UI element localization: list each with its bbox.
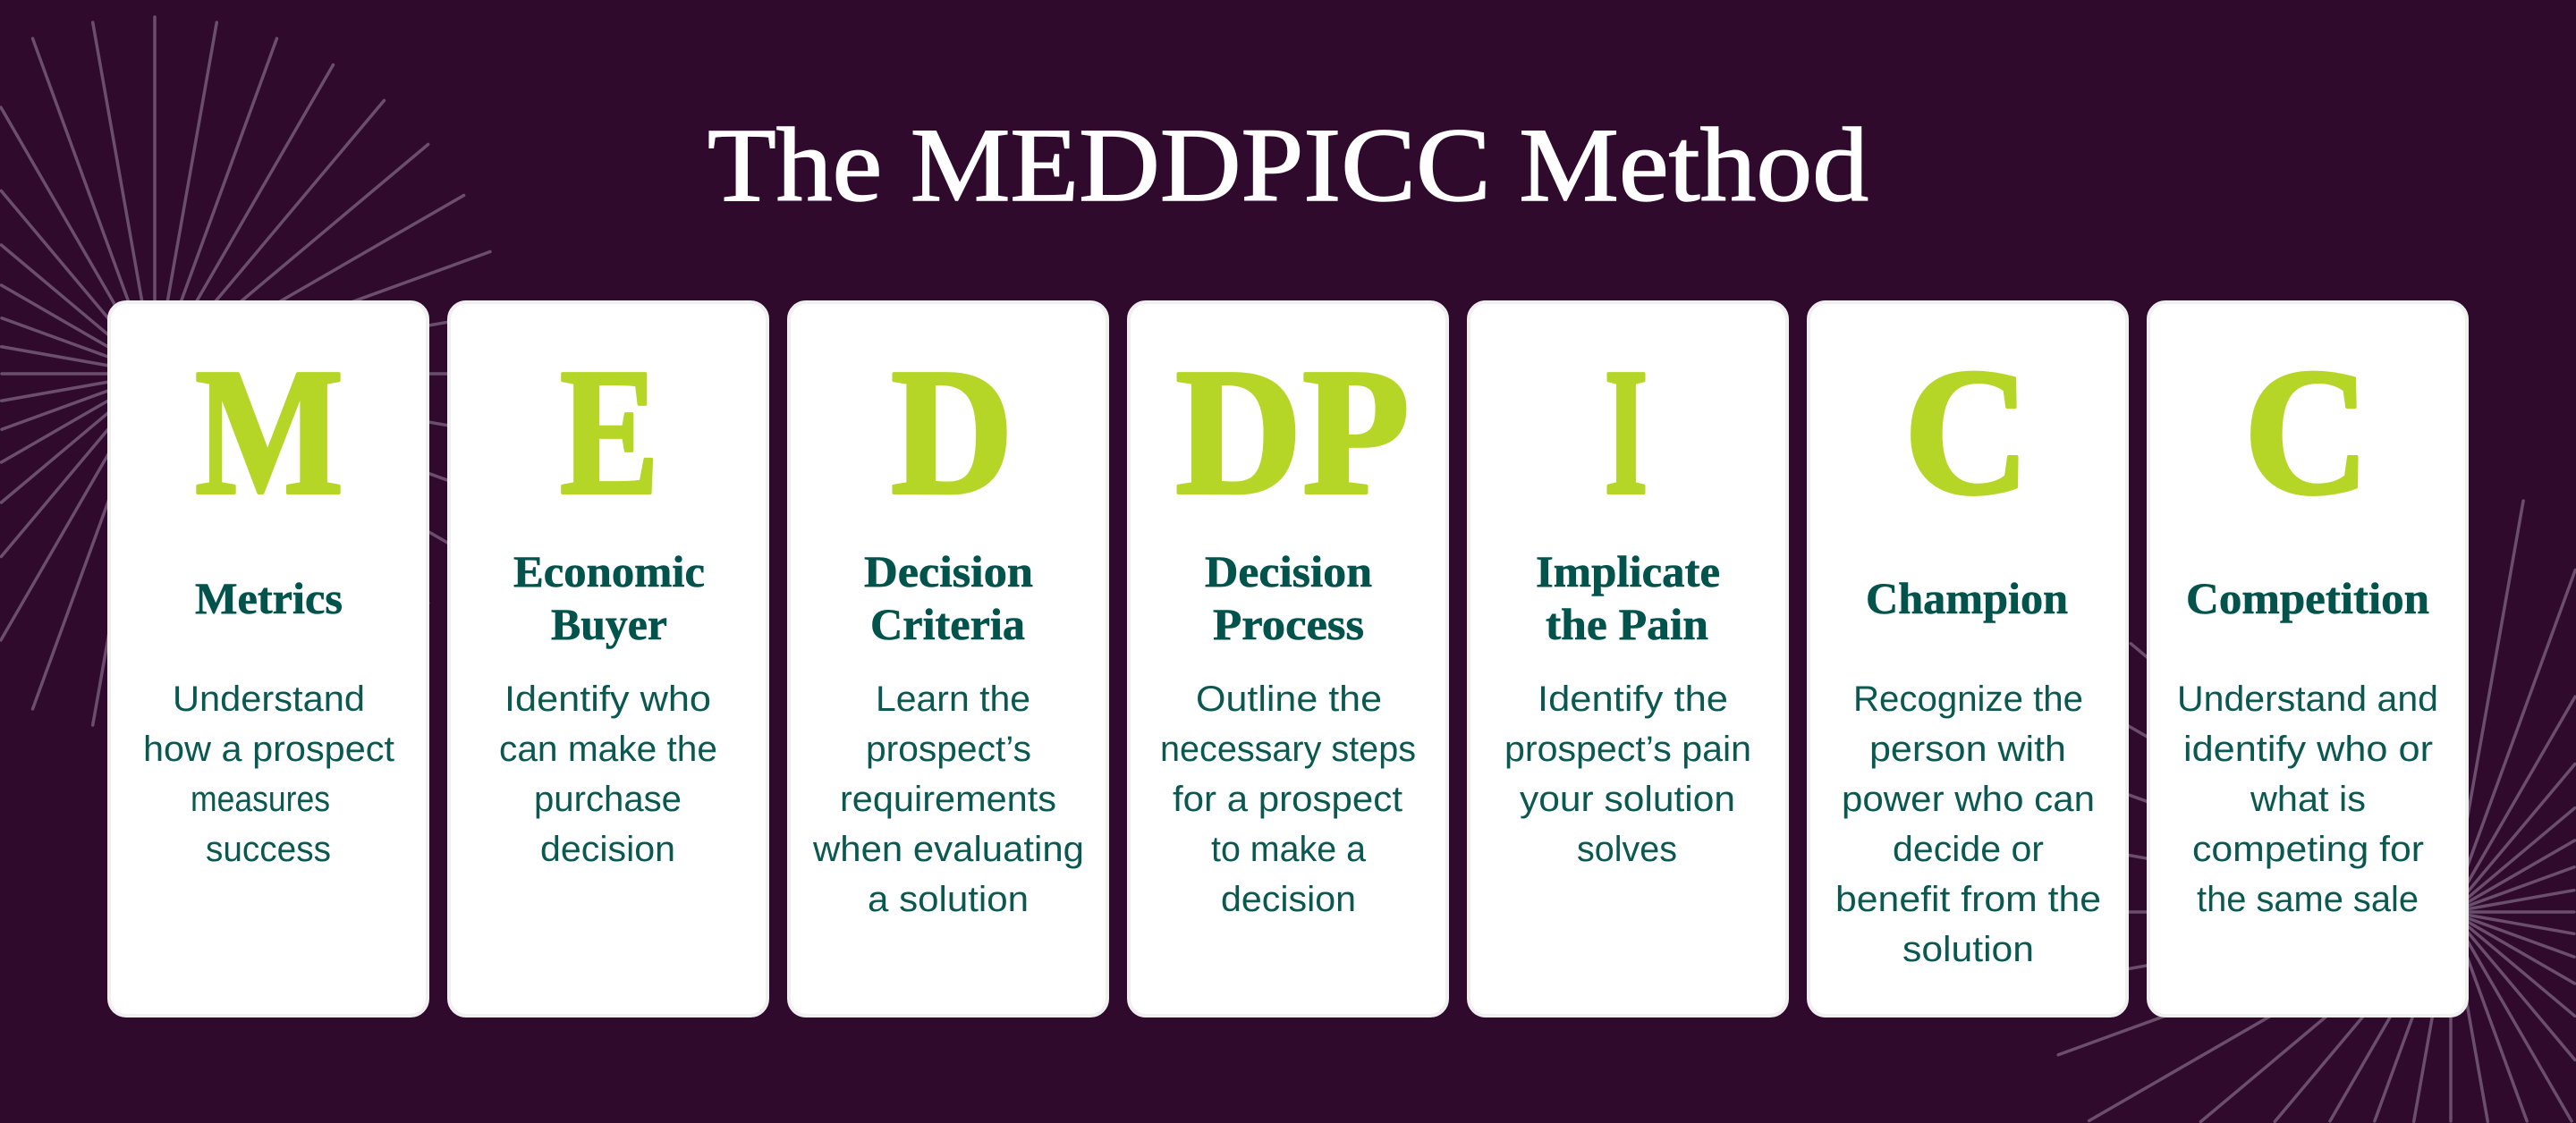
description: Decision Criteria: prospect’s xyxy=(866,730,1031,769)
description: Competition: competing for xyxy=(2192,830,2424,869)
description: Champion: benefit from the xyxy=(1835,880,2101,919)
panel: I Implicate the Pain xyxy=(1469,302,1787,1016)
description: Implicate the Pain: prospect’s pain xyxy=(1504,730,1751,769)
description: Champion: solution xyxy=(1902,930,2034,969)
description: Champion xyxy=(1835,680,2101,969)
heading: Decision Criteria xyxy=(864,546,1033,649)
letter C: C xyxy=(1903,331,2030,532)
description: Decision Process: decision xyxy=(1221,880,1356,919)
description: Economic Buyer: Identify who xyxy=(504,680,711,719)
starburst: bottom right xyxy=(2033,494,2575,1122)
heading: Implicate the Pain xyxy=(1536,546,1720,649)
description: Champion: person with xyxy=(1869,730,2066,769)
description: Champion: decide or xyxy=(1893,830,2044,869)
heading: Economic Buyer xyxy=(513,546,705,649)
description: Implicate the Pain: Identify the xyxy=(1538,680,1728,719)
description: Competition: identify who or xyxy=(2183,730,2433,769)
description: Decision Process xyxy=(1160,680,1416,919)
panel: C Champion xyxy=(1809,302,2127,1016)
description: Decision Process: to make a xyxy=(1211,830,1367,869)
description: Metrics: measures xyxy=(191,780,330,819)
starburst: top left xyxy=(1,17,512,730)
description: Economic Buyer: decision xyxy=(540,830,675,869)
description: Decision Criteria: a solution xyxy=(868,880,1029,919)
panel: D Decision Criteria xyxy=(789,302,1107,1016)
letter I: I xyxy=(1605,331,1648,532)
description: Decision Process: necessary steps xyxy=(1160,730,1416,769)
heading: Metrics: Metrics xyxy=(195,573,343,623)
description: Implicate the Pain xyxy=(1504,680,1751,869)
heading: Decision Criteria: Criteria xyxy=(870,599,1025,649)
description: Champion: power who can xyxy=(1842,780,2095,819)
heading: Champion: Champion xyxy=(1866,573,2068,623)
description: Economic Buyer: can make the xyxy=(499,730,717,769)
letter M: M xyxy=(195,331,343,532)
description: Economic Buyer: purchase xyxy=(534,780,682,819)
heading: Decision Criteria: Decision xyxy=(864,546,1033,596)
heading: Economic Buyer: Buyer xyxy=(551,599,667,649)
description: Decision Process: for a prospect xyxy=(1173,780,1402,819)
description: Competition: what is xyxy=(2250,780,2366,819)
heading: Decision Process xyxy=(1205,546,1372,649)
panel: E Economic Buyer xyxy=(449,302,767,1016)
description: Economic Buyer xyxy=(499,680,717,869)
panel: M Metrics xyxy=(109,302,428,1016)
panel: DP Decision Process xyxy=(1129,302,1447,1016)
letter D: D xyxy=(891,331,1013,532)
heading: Decision Process: Decision xyxy=(1205,546,1372,596)
letters DP: DP xyxy=(1175,331,1410,532)
description: Competition: Understand and xyxy=(2177,680,2438,719)
description: Decision Criteria xyxy=(812,680,1084,919)
panel: C Competition xyxy=(2148,302,2467,1016)
description: Metrics: how a prospect xyxy=(143,730,394,769)
description: Metrics: success xyxy=(206,830,331,869)
heading: Decision Process: Process xyxy=(1213,599,1364,649)
letter E: E xyxy=(560,331,659,532)
description: Decision Criteria: when evaluating xyxy=(812,830,1084,869)
description: Implicate the Pain: solves xyxy=(1577,830,1677,869)
description: Competition: the same sale xyxy=(2197,880,2419,919)
description: Metrics: Understand xyxy=(173,680,365,719)
title: The MEDDPICC Method xyxy=(708,106,1868,224)
letter C: C xyxy=(2243,331,2370,532)
heading: Implicate the Pain: Implicate xyxy=(1536,546,1720,596)
description: Competition xyxy=(2177,680,2438,919)
description: Champion: Recognize the xyxy=(1853,680,2083,719)
heading: Economic Buyer: Economic xyxy=(513,546,705,596)
description: Decision Criteria: requirements xyxy=(840,780,1056,819)
heading: Competition: Competition xyxy=(2186,573,2429,623)
heading: Implicate the Pain: the Pain xyxy=(1546,599,1708,649)
description: Decision Criteria: Learn the xyxy=(876,680,1030,719)
description: Decision Process: Outline the xyxy=(1196,680,1382,719)
description: Implicate the Pain: your solution xyxy=(1520,780,1735,819)
description: Metrics xyxy=(143,680,394,869)
